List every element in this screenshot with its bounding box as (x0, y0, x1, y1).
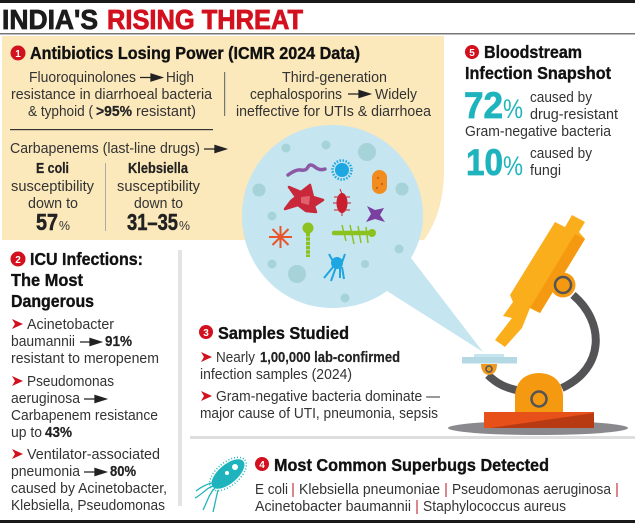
stat 10%: caused by (530, 146, 593, 162)
superbug list: Acinetobacter baumannii (255, 499, 411, 515)
microbe: blue virus (332, 160, 352, 180)
heading 5 (465, 42, 611, 83)
cephalosporins text: cephalosporins (250, 87, 342, 103)
heading 2: ICU Infections: (30, 249, 143, 269)
superbug list: | (615, 482, 619, 498)
microbe: purple spiral (288, 165, 325, 175)
klebsiella stat: susceptibility (117, 179, 201, 195)
badge 2: 2 (15, 255, 21, 266)
panel: antibiotics background (2, 36, 444, 240)
stat 72%: drug-resistant (530, 107, 618, 123)
badge 5 (465, 45, 479, 59)
stat 10%: fungi (530, 163, 561, 179)
microbe: orange asterisk (269, 226, 292, 248)
bullet: pseudomonas: aeruginosa (11, 391, 81, 407)
cephalosporins text: ineffective for UTIs & diarrhoea (236, 104, 432, 120)
title (2, 4, 303, 35)
microbe: orange capsule (372, 170, 387, 194)
bullet: acinetobacter (11, 317, 159, 367)
fluoroquinolones text: >95% (96, 104, 132, 120)
heading 2: Dangerous (11, 291, 94, 311)
klebsiella stat: % (179, 218, 190, 233)
klebsiella stat: down to (134, 196, 183, 212)
cephalosporins text: Widely (375, 87, 418, 103)
fluoroquinolones text: Fluoroquinolones (29, 70, 136, 86)
bullet: gram-negative: major cause of UTI, pneumonia, sepsis (200, 406, 438, 422)
badge 5: 5 (469, 48, 475, 59)
bullet: ventilator: 80% (110, 464, 136, 480)
title: INDIA'S (2, 4, 98, 35)
bullet: ventilator: Klebsiella, Pseudomonas (11, 498, 165, 514)
microbe: red blob (285, 185, 323, 212)
fluoroquinolones text: & typhoid ( (28, 104, 93, 120)
cephalosporins text: Third-generation (282, 70, 387, 86)
panel 5: bloodstream infection snapshot (464, 42, 618, 183)
bullet: ventilator: Ventilator-associated (27, 447, 160, 463)
stat 72% (464, 85, 618, 140)
bullet: acinetobacter: 91% (105, 334, 132, 350)
heading 5: Infection Snapshot (465, 63, 611, 83)
microbe: green chain (302, 222, 314, 257)
badge 4 (255, 457, 269, 471)
bullet: pseudomonas: 43% (45, 425, 72, 441)
microbe: green centipede (334, 225, 376, 244)
stat 10%: 10 (466, 142, 503, 183)
klebsiella stat (117, 161, 201, 235)
microbe: blue phage (324, 254, 345, 281)
superbug list: Pseudomonas aeruginosa (452, 482, 612, 498)
klebsiella stat: 31–35 (127, 209, 178, 235)
e coli stat: 57 (36, 209, 58, 235)
superbug list: | (291, 482, 295, 498)
heading 4: Most Common Superbugs Detected (274, 455, 549, 475)
superbug list (255, 482, 619, 515)
carbapenems text: Carbapenems (last-line drugs) (10, 141, 200, 157)
bullet: samples (200, 350, 400, 383)
e coli stat: down to (28, 196, 78, 212)
bullet: gram-negative (200, 389, 440, 422)
heading 3: Samples Studied (218, 323, 349, 343)
stat 72%: caused by (530, 90, 593, 106)
icon: teal bacterium (195, 451, 252, 512)
stat 10%: % (503, 151, 523, 181)
badge 3: 3 (203, 328, 209, 339)
bullet: ventilator: caused by Acinetobacter, (11, 481, 167, 497)
bullet: acinetobacter: Acinetobacter (27, 317, 114, 333)
badge 4: 4 (259, 460, 265, 471)
heading 2: The Most (11, 270, 83, 290)
stat 72%: 72 (464, 85, 503, 126)
heading 2 (11, 249, 143, 311)
badge 1: 1 (15, 49, 21, 60)
superbug list: | (415, 499, 419, 515)
superbug list: Staphylococcus aureus (423, 499, 566, 515)
heading 1: Antibiotics Losing Power (ICMR 2024 Data) (30, 43, 360, 63)
bullet: ventilator (11, 447, 167, 514)
icon: microscope (448, 215, 628, 435)
stat 72%: Gram-negative bacteria (465, 124, 612, 140)
panel 2: icu infections (10, 249, 167, 514)
icon: magnifier bubble with microbes (242, 125, 483, 352)
e coli stat: susceptibility (11, 179, 95, 195)
panel 4: most common superbugs (255, 455, 619, 515)
bullet: ventilator: pneumonia (11, 464, 81, 480)
stat 72%: % (503, 94, 523, 124)
badge 3 (199, 325, 213, 339)
bullet: pseudomonas: Carbapenem resistance (11, 408, 158, 424)
bullet: acinetobacter: resistant to meropenem (11, 351, 159, 367)
microbe: red bacterium (333, 189, 351, 216)
bullet: acinetobacter: baumannii (11, 334, 75, 350)
bullet: pseudomonas: Pseudomonas (27, 374, 114, 390)
fluoroquinolones text: High (166, 70, 194, 86)
title: RISING THREAT (107, 4, 303, 35)
e coli stat (11, 161, 95, 235)
klebsiella stat: Klebsiella (128, 161, 189, 177)
cephalosporins text (236, 70, 432, 120)
heading 5: Bloodstream (484, 42, 582, 62)
fluoroquinolones text: resistant) (136, 104, 196, 120)
fluoroquinolones text: resistance in diarrhoeal bacteria (11, 87, 213, 103)
panel 3: samples studied (199, 323, 440, 422)
bullet: samples: 1,00,000 lab-confirmed (260, 350, 400, 366)
fluoroquinolones text (11, 70, 213, 120)
bullet: pseudomonas: up to (11, 425, 42, 441)
microbe: purple star (366, 206, 385, 222)
panel 1: antibiotics losing power (10, 43, 432, 235)
e coli stat: % (59, 218, 70, 233)
superbug list: E coli (255, 482, 288, 498)
superbug list: Klebsiella pneumoniae (299, 482, 440, 498)
bullet: samples: infection samples (2024) (200, 367, 352, 383)
e coli stat: E coli (36, 161, 69, 177)
superbug list: | (444, 482, 448, 498)
bullet: gram-negative: Gram-negative bacteria dominate — (216, 389, 440, 405)
stat 10% (466, 142, 593, 183)
bullet: pseudomonas (11, 374, 158, 441)
badge 2 (10, 252, 26, 266)
floating cells (252, 140, 408, 302)
badge 1 (10, 46, 26, 60)
bullet: samples: Nearly (216, 350, 256, 366)
